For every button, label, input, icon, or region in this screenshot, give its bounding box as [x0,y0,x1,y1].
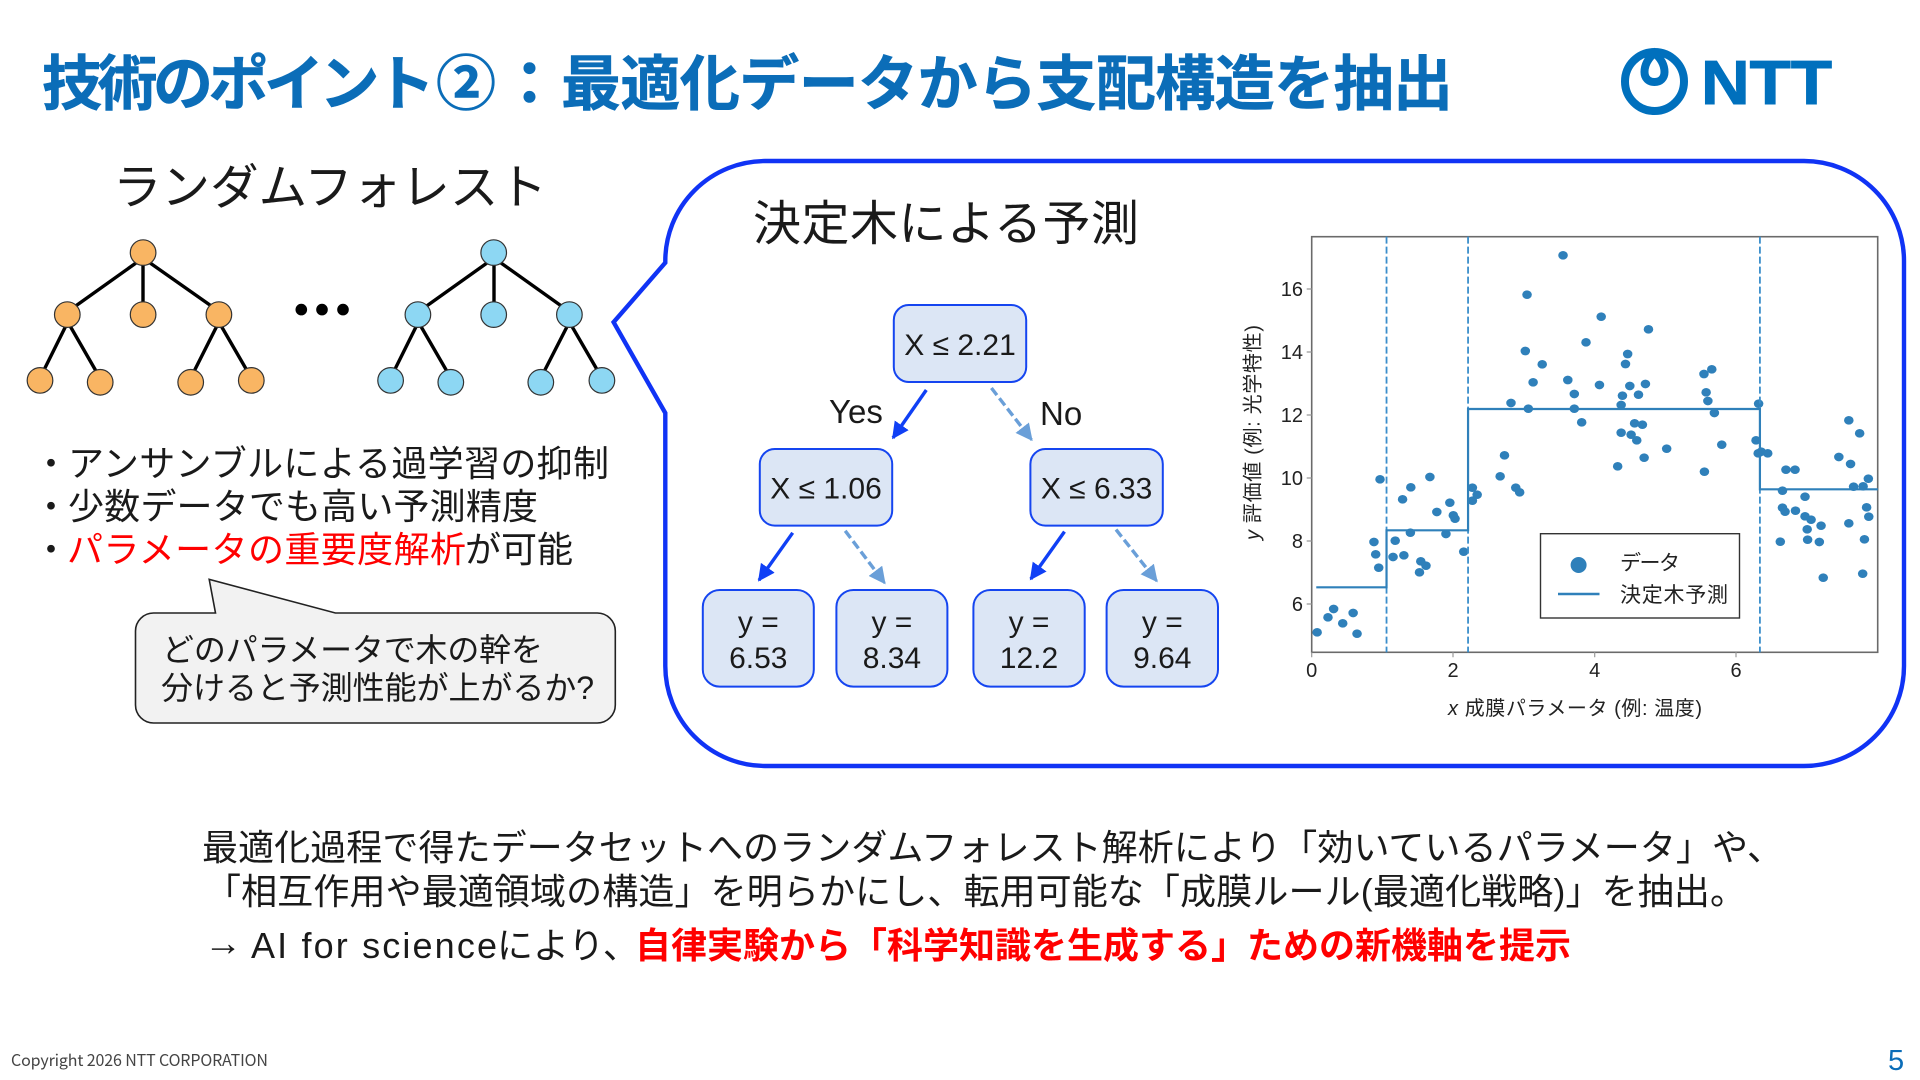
callout: question: 分けると予測性能が上がるか? [161,670,594,706]
y tick labels: 8 [1292,531,1303,553]
ellipsis dots [296,304,349,315]
y tick labels [1281,279,1303,616]
summary text: AI for science [251,925,497,966]
leaf: 9.64: 9.64 [1133,642,1191,675]
panel: decision tree bubble [614,161,1904,766]
y axis label: y 評価値 (例: 光学特性) [1242,325,1264,542]
leaf: 12.2: y = [1009,606,1049,639]
title: 技術のポイント [42,51,435,118]
leaf: 9.64: y = [1142,606,1183,639]
node: root [894,305,1026,382]
leaf: 6.53 [703,590,814,687]
title: ： [500,51,560,118]
page number: 5 [1888,1045,1904,1077]
summary text: 自律実験から「科学知識を生成する」ための新機軸を提示 [635,925,1571,966]
diagram: blue tree [378,240,615,395]
split lines and step prediction [1316,237,1878,652]
arrows: yes branches [759,390,1064,580]
bullet list [33,443,609,570]
leaf: 6.53: 6.53 [729,642,787,675]
x tick labels: 2 [1447,660,1459,682]
heading: random forest: ランダムフォレスト [113,161,547,215]
title: ② [436,51,496,118]
title [42,51,1453,118]
bullet list: ・ [33,529,69,570]
arrows: no branches [845,388,1157,583]
legend [1540,534,1740,618]
leaf: 8.34: y = [871,606,912,639]
y tick labels: 10 [1281,468,1303,490]
leaf: 8.34 [836,590,947,687]
callout: question [136,579,615,723]
data points [1312,251,1874,638]
leaf: 8.34: 8.34 [863,642,921,675]
y tick labels: 14 [1281,342,1303,364]
node: right split: X ≤ 6.33 [1041,472,1152,506]
logo: NTT [1625,49,1832,118]
callout: question: どのパラメータで木の幹を [162,632,543,668]
legend: データ [1620,552,1680,575]
legend: 決定木予測 [1620,584,1728,607]
leaf: 12.2: 12.2 [1000,642,1058,675]
summary text: 最適化過程で得たデータセットへのランダムフォレスト解析により「効いているパラメータ」や、 [202,827,1783,868]
y tick labels: 16 [1281,279,1303,301]
diagram: orange tree [27,240,264,395]
copyright: Copyright 2026 NTT CORPORATION [11,1047,268,1071]
node: left split: X ≤ 1.06 [770,472,882,506]
summary text: 「相互作用や最適領域の構造」を明らかにし、転用可能な「成膜ルール(最適化戦略)」を抽出。 [205,871,1746,912]
axis ticks [1307,289,1736,657]
leaf: 9.64 [1107,590,1218,687]
bullet list: アンサンブルによる過学習の抑制 [68,443,609,484]
title: 最適化データから支配構造を抽出 [561,51,1453,118]
x tick labels: 0 [1306,660,1317,682]
summary text: → [204,922,242,963]
bullet list: パラメータの重要度解析 [67,529,466,570]
leaf: 6.53: y = [738,606,779,639]
chart: scatter with decision tree prediction [1242,237,1878,720]
node: right split [1030,449,1163,526]
x tick labels: 6 [1730,660,1742,682]
summary text [202,827,1783,966]
node: left split [760,449,892,526]
summary text: により、 [497,925,639,966]
y tick labels: 12 [1281,405,1303,427]
bullet list: 少数データでも高い予測精度 [68,486,538,527]
bullet list: ・ [33,486,69,527]
label: no: No [1040,395,1082,432]
x tick labels: 4 [1589,660,1600,682]
x tick labels [1306,660,1742,682]
heading: decision tree prediction: 決定木による予測 [753,198,1139,251]
bullet list: ・ [33,443,69,484]
node: root: X ≤ 2.21 [904,329,1016,362]
plot frame [1312,237,1878,652]
bullet list: が可能 [465,529,573,570]
logo: NTT: NTT [1701,49,1832,118]
leaf: 12.2 [973,590,1085,687]
diagram: decision tree [703,305,1218,687]
label: yes: Yes [829,393,883,430]
x axis label: x 成膜パラメータ (例: 温度) [1447,697,1702,720]
y tick labels: 6 [1292,594,1303,616]
